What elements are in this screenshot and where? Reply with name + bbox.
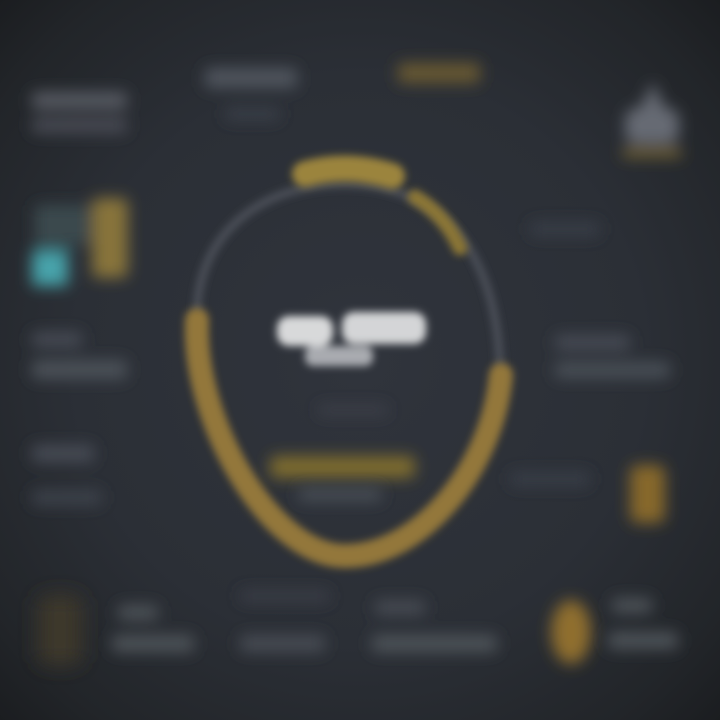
central grey subtitle [298, 488, 382, 501]
heading: top gold [398, 63, 480, 83]
grey ring [197, 184, 500, 370]
text block: top left [32, 92, 127, 133]
text block: bottom centre [240, 590, 330, 652]
icon: gold right [630, 465, 665, 523]
text block: left middle [32, 332, 127, 379]
icon: gold bottom left [38, 595, 82, 665]
gold arc: top [305, 168, 392, 176]
gold arc: upper right [415, 197, 460, 248]
text block: right middle [555, 335, 670, 378]
icon: gold bottom right [551, 600, 591, 664]
text block: bottom right [608, 598, 678, 649]
text block: bottom centre right [372, 600, 497, 652]
text block: left lower [32, 445, 102, 505]
text block: right lower [510, 472, 590, 486]
central gold subtitle [270, 456, 415, 478]
text block: bottom left [112, 605, 194, 652]
central ring diagram [197, 168, 501, 556]
central small caption [318, 405, 388, 415]
heading: top centre [205, 68, 297, 120]
text block: right upper [530, 222, 600, 236]
icon: bell top right [622, 82, 682, 157]
gold arc: bottom loop [197, 320, 501, 556]
central title [277, 312, 426, 366]
icon: left chart [32, 198, 128, 286]
